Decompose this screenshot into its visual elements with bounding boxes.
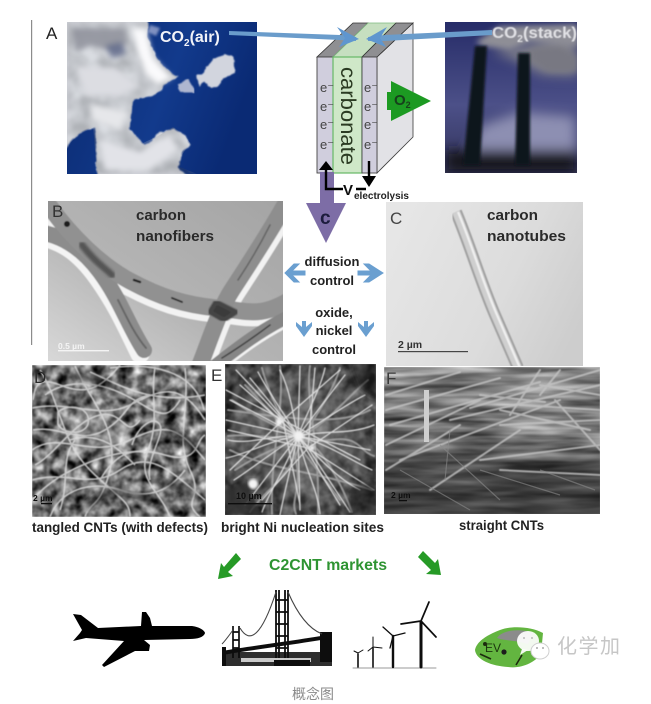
electrons left 2: e⁻ (320, 99, 334, 114)
caption D: tangled CNTs (with defects) (32, 520, 208, 535)
arrow: CO2 air to cell (229, 27, 359, 47)
panel E letter: E (211, 366, 222, 385)
panel E scale bar (228, 491, 272, 504)
fiber dark cores (82, 245, 112, 275)
panel E: bright Ni nucleation (225, 364, 376, 515)
panel C heading line 2: nanotubes (487, 228, 566, 245)
electrolysis subscript: electrolysis (354, 190, 409, 202)
panel C letter: C (390, 209, 402, 228)
oxide nickel text 3: control (312, 342, 356, 357)
oxide nickel text 2: nickel (316, 323, 352, 338)
arrow: O2 (387, 81, 431, 121)
carbonate front (333, 57, 362, 173)
fiber halos (38, 236, 140, 354)
markets heading: C2CNT markets (269, 557, 387, 574)
panel B scale bar (58, 341, 109, 351)
O2 label: O (394, 92, 406, 109)
voltage wiring (319, 161, 409, 202)
V electrolysis label: V (343, 182, 353, 199)
oxide nickel text: oxide, (315, 305, 353, 320)
arrow: diffusion right (358, 264, 383, 282)
control labels (285, 254, 383, 357)
panel C heading line 1: carbon (487, 207, 538, 224)
left electrode front (317, 57, 333, 173)
panel F: straight CNTs (384, 367, 600, 514)
cell right side face (377, 23, 413, 173)
O2 label: 2 (406, 100, 411, 110)
panel D letter: D (34, 368, 46, 387)
arrow: oxide down left (296, 321, 312, 337)
watermark: chat logo (517, 631, 549, 659)
EV label: EV (485, 641, 501, 655)
arrow: diffusion left (285, 264, 305, 282)
figure caption: 概念图 (292, 686, 334, 702)
electrons right 4: e⁻ (364, 137, 378, 152)
cell top carbonate (333, 23, 396, 57)
c label: c (320, 208, 331, 229)
stack label CO2 stack: (stack) (523, 25, 577, 42)
icon: electric car (475, 627, 543, 667)
sky label CO2 air: CO (160, 29, 184, 46)
electrons right 3: e⁻ (364, 117, 378, 132)
cell top left electrode (317, 23, 368, 57)
panel B heading line 2: nanofibers (136, 228, 214, 245)
right electrode front (362, 57, 377, 173)
panel B scale bar: 0.5 µm (58, 341, 85, 351)
stack label CO2 stack: 2 (517, 34, 523, 45)
panel F scale bar: 2 µm (391, 490, 411, 500)
caption F: straight CNTs (459, 518, 544, 533)
panel B heading line 1: carbon (136, 207, 186, 224)
left vertical rule (31, 20, 32, 345)
panel A label: A (46, 24, 58, 43)
cell top right electrode (362, 23, 413, 57)
arrow: oxide down right (358, 321, 374, 337)
panel D scale bar: 2 µm (33, 493, 53, 503)
arrow: CO2 stack to cell (366, 27, 492, 47)
photo: sky with clouds (67, 22, 257, 174)
electrolysis cell (317, 23, 413, 173)
panel F letter: F (386, 369, 396, 388)
diffusion control text 2: control (310, 273, 354, 288)
panel B: carbon nanofibers (48, 201, 283, 361)
diffusion control text: diffusion (305, 254, 359, 269)
sky label CO2 air: 2 (184, 38, 190, 49)
electrons left 3: e⁻ (320, 117, 334, 132)
caption E: bright Ni nucleation sites (221, 520, 384, 535)
fiber bodies (40, 232, 144, 350)
icon: airplane (73, 612, 205, 667)
electrons left: e⁻ (320, 80, 334, 95)
panel C scale bar: 2 µm (398, 339, 422, 351)
panel B letter: B (52, 202, 63, 221)
arrow: markets left (218, 553, 241, 579)
nanotube (456, 212, 518, 368)
panel C scale bar (398, 339, 468, 352)
carbonate label: carbonate (336, 67, 359, 165)
panel D: tangled CNTs (32, 365, 206, 517)
sky label CO2 air: (air) (190, 29, 220, 46)
icon: wind turbines (353, 602, 436, 668)
arrow: markets right (418, 551, 441, 575)
panel C: carbon nanotubes (386, 202, 583, 368)
photo: smokestacks (445, 22, 577, 173)
icon: suspension bridge (222, 590, 332, 666)
electrons right 2: e⁻ (364, 99, 378, 114)
electrons left 4: e⁻ (320, 137, 334, 152)
panel E scale bar: 10 µm (236, 491, 262, 501)
watermark text: 化学加 (557, 635, 620, 658)
arrow: carbon product (306, 172, 346, 243)
stack label CO2 stack: CO (492, 25, 516, 42)
electrons right: e⁻ (364, 80, 378, 95)
